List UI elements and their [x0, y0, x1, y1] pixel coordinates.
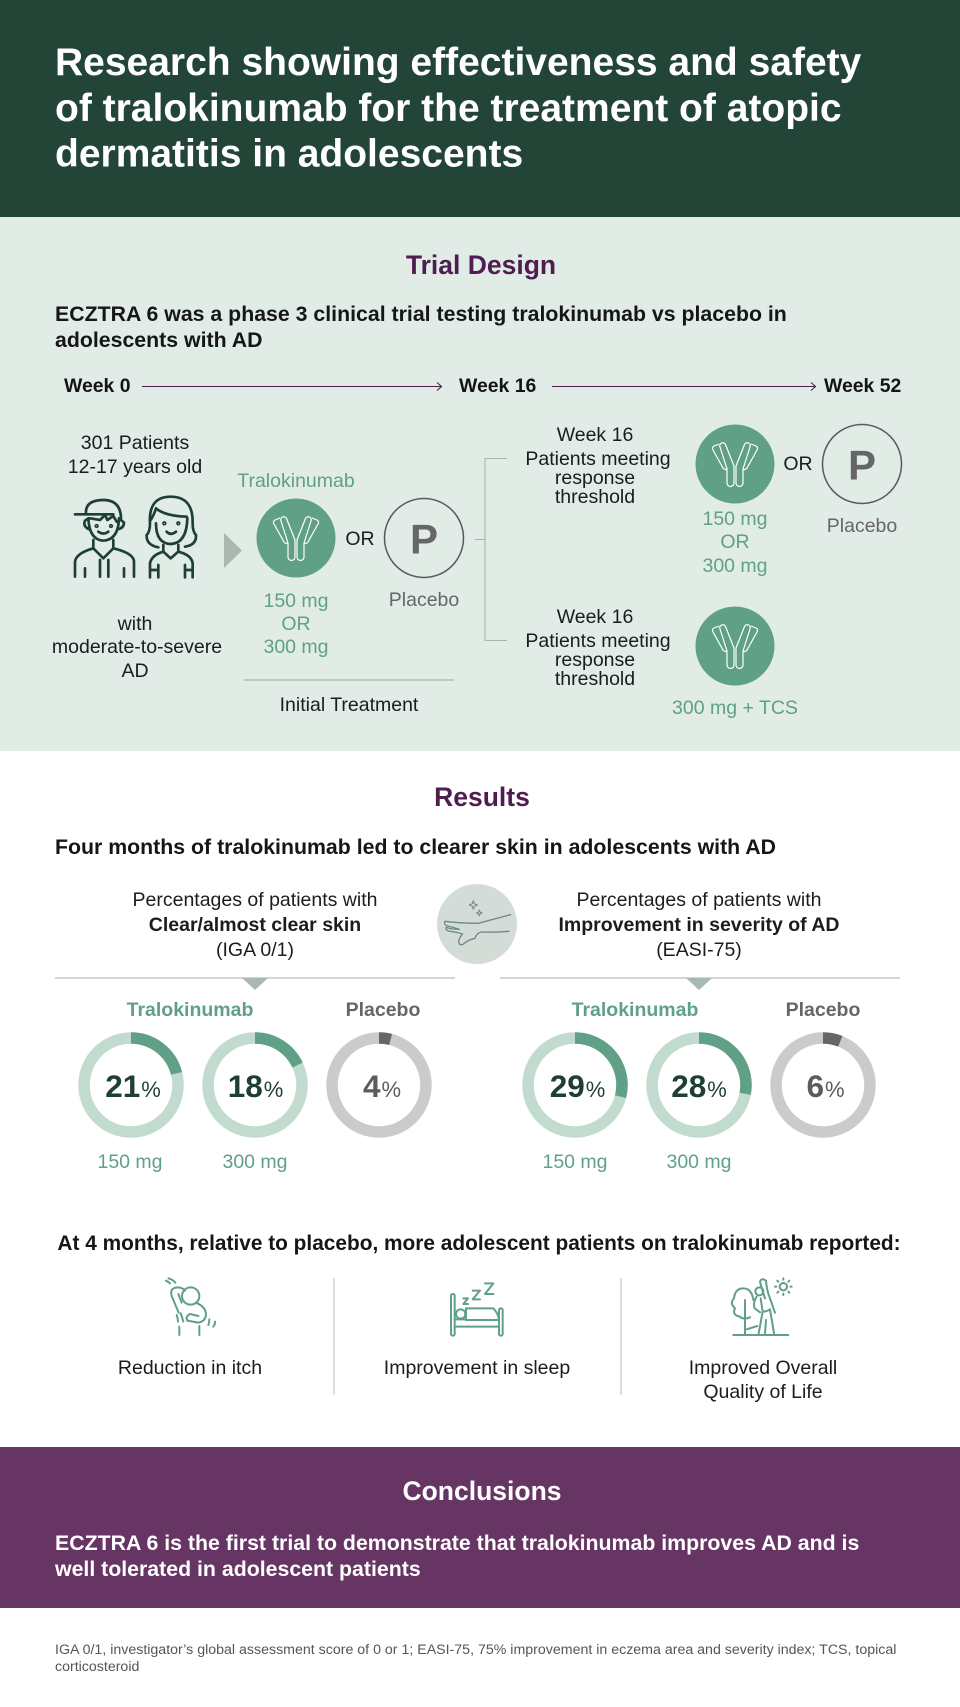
title: of tralokinumab for the treatment of atopic [55, 87, 842, 130]
icon: quality of life [732, 1278, 792, 1335]
label: placebo responders: Placebo [827, 515, 897, 537]
text: second group [525, 606, 671, 690]
initial doses: 150 mg [263, 590, 329, 612]
clear skin heading: (IGA 0/1) [216, 939, 294, 961]
responders doses [702, 508, 768, 577]
timeline: Week 0 [64, 375, 130, 397]
text: second group: threshold [555, 668, 635, 690]
label: quality of life: Quality of Life [703, 1381, 823, 1403]
icon: skin [437, 884, 517, 964]
label: itch: Reduction in itch [118, 1357, 262, 1379]
heading: trial design: Trial Design [406, 250, 556, 280]
patient reported heading: At 4 months, relative to placebo, more adolescent patients on tralokinumab reported: [57, 1232, 901, 1255]
heading: conclusions: Conclusions [402, 1476, 562, 1506]
text: responders: Week 16 [557, 424, 633, 446]
label: quality of life [689, 1357, 837, 1403]
timeline [64, 375, 901, 397]
timeline: Week 16 [459, 375, 536, 397]
donut: 6 percent [776, 1038, 870, 1132]
trial summary text [55, 302, 787, 352]
dose labels: 300 mg [222, 1151, 288, 1173]
icon: placebo responders [822, 424, 902, 504]
responders doses: 300 mg [702, 555, 768, 577]
donut: 21 percent [84, 1038, 178, 1132]
initial treatment caption: Initial Treatment [280, 694, 419, 716]
label: quality of life: Improved Overall [689, 1357, 837, 1379]
text: second group: Patients meeting [525, 630, 671, 652]
text: responders [525, 424, 671, 508]
responders doses: 150 mg [702, 508, 768, 530]
patient population text (top) [68, 432, 202, 478]
icon: antibody second group [696, 606, 774, 686]
trial summary text: ECZTRA 6 was a phase 3 clinical trial testing tralokinumab vs placebo in [55, 302, 787, 326]
label: sleep: Improvement in sleep [384, 1357, 570, 1379]
labels: Tralokinumab [127, 999, 253, 1021]
patient population text (bottom) [52, 613, 222, 682]
label: dose TCS: 300 mg + TCS [672, 697, 798, 719]
arrow: to treatment [224, 533, 242, 568]
donut: 18 percent: 18% [228, 1068, 283, 1104]
donut: 28 percent [652, 1038, 746, 1132]
panel: trial design [0, 217, 960, 751]
patient population text (top): 301 Patients [81, 432, 189, 454]
dose labels: 150 mg [542, 1151, 608, 1173]
severity heading [558, 889, 840, 961]
conclusions text: ECZTRA 6 is the first trial to demonstrate that tralokinumab improves AD and is [55, 1531, 859, 1555]
initial doses [263, 590, 329, 658]
clear skin heading: Percentages of patients with [133, 889, 377, 911]
labels: Tralokinumab [572, 999, 698, 1021]
text: responders: threshold [555, 486, 635, 508]
footnote [55, 1642, 896, 1675]
donut: 18 percent [208, 1038, 302, 1132]
donut: 4 percent [332, 1038, 426, 1132]
text: responders: response [555, 467, 635, 489]
heading: results: Results [434, 782, 530, 812]
donut: 21 percent: 21% [105, 1068, 161, 1104]
severity heading: Improvement in severity of AD [558, 914, 840, 936]
donut: 29 percent [528, 1038, 622, 1132]
severity heading: (EASI-75) [656, 939, 742, 961]
dose labels: 150 mg [97, 1151, 163, 1173]
divider [620, 1278, 622, 1395]
responders doses: OR [720, 531, 750, 553]
donut: 29 percent: 29% [550, 1068, 605, 1104]
footnote: IGA 0/1, investigator’s global assessment score of 0 or 1; EASI-75, 75% improvement in eczema area and severity index; TCS, topical [55, 1642, 896, 1658]
patient population text (bottom): moderate-to-severe [52, 636, 222, 658]
label: placebo initial: Placebo [389, 589, 459, 611]
trial summary text: adolescents with AD [55, 328, 262, 352]
text: second group: Week 16 [557, 606, 633, 628]
icon: antibody responders [696, 424, 774, 504]
icon: antibody initial [256, 498, 336, 578]
icon: placebo initial [384, 498, 464, 578]
panel: clear skin: Placebo [346, 999, 420, 1021]
divider [333, 1278, 335, 1395]
icon: adolescents [75, 497, 196, 577]
title [55, 41, 862, 176]
donut: 28 percent: 28% [671, 1068, 727, 1104]
donut: 6 percent: 6% [806, 1068, 845, 1104]
patient population text (bottom): with [117, 613, 152, 635]
initial doses: OR [281, 613, 311, 635]
footnote: corticosteroid [55, 1659, 139, 1675]
dose labels [97, 1151, 288, 1173]
label: tralokinumab: Tralokinumab [237, 470, 355, 492]
icon: sleep [451, 1283, 503, 1336]
dose labels: 300 mg [666, 1151, 732, 1173]
conclusions text [54, 1531, 859, 1581]
results summary: Four months of tralokinumab led to clearer skin in adolescents with AD [55, 835, 776, 859]
dose labels [542, 1151, 732, 1173]
initial doses: 300 mg [263, 636, 329, 658]
text: or: OR [345, 528, 375, 550]
severity heading: Percentages of patients with [577, 889, 821, 911]
text: second group: response [555, 649, 635, 671]
panel: severity improvement [500, 889, 900, 1173]
panel: severity improvement: Placebo [786, 999, 860, 1021]
divider with pointer [500, 977, 900, 979]
bracket [475, 458, 507, 640]
panel: clear skin [55, 889, 455, 1173]
text: responders: Patients meeting [525, 448, 671, 470]
clear skin heading: Clear/almost clear skin [149, 914, 361, 936]
patient population text (bottom): AD [121, 660, 149, 682]
divider with pointer [55, 977, 455, 979]
panel: conclusions [0, 1447, 960, 1608]
icon: itch [166, 1278, 215, 1335]
patient population text (top): 12-17 years old [68, 456, 202, 478]
donut: 4 percent: 4% [363, 1068, 401, 1104]
title: Research showing effectiveness and safety [55, 41, 862, 84]
text: or responders: OR [783, 453, 813, 475]
clear skin heading [133, 889, 377, 961]
conclusions text: well tolerated in adolescent patients [54, 1557, 421, 1581]
timeline: Week 52 [824, 375, 901, 397]
header band [0, 0, 960, 217]
title: dermatitis in adolescents [55, 132, 523, 176]
